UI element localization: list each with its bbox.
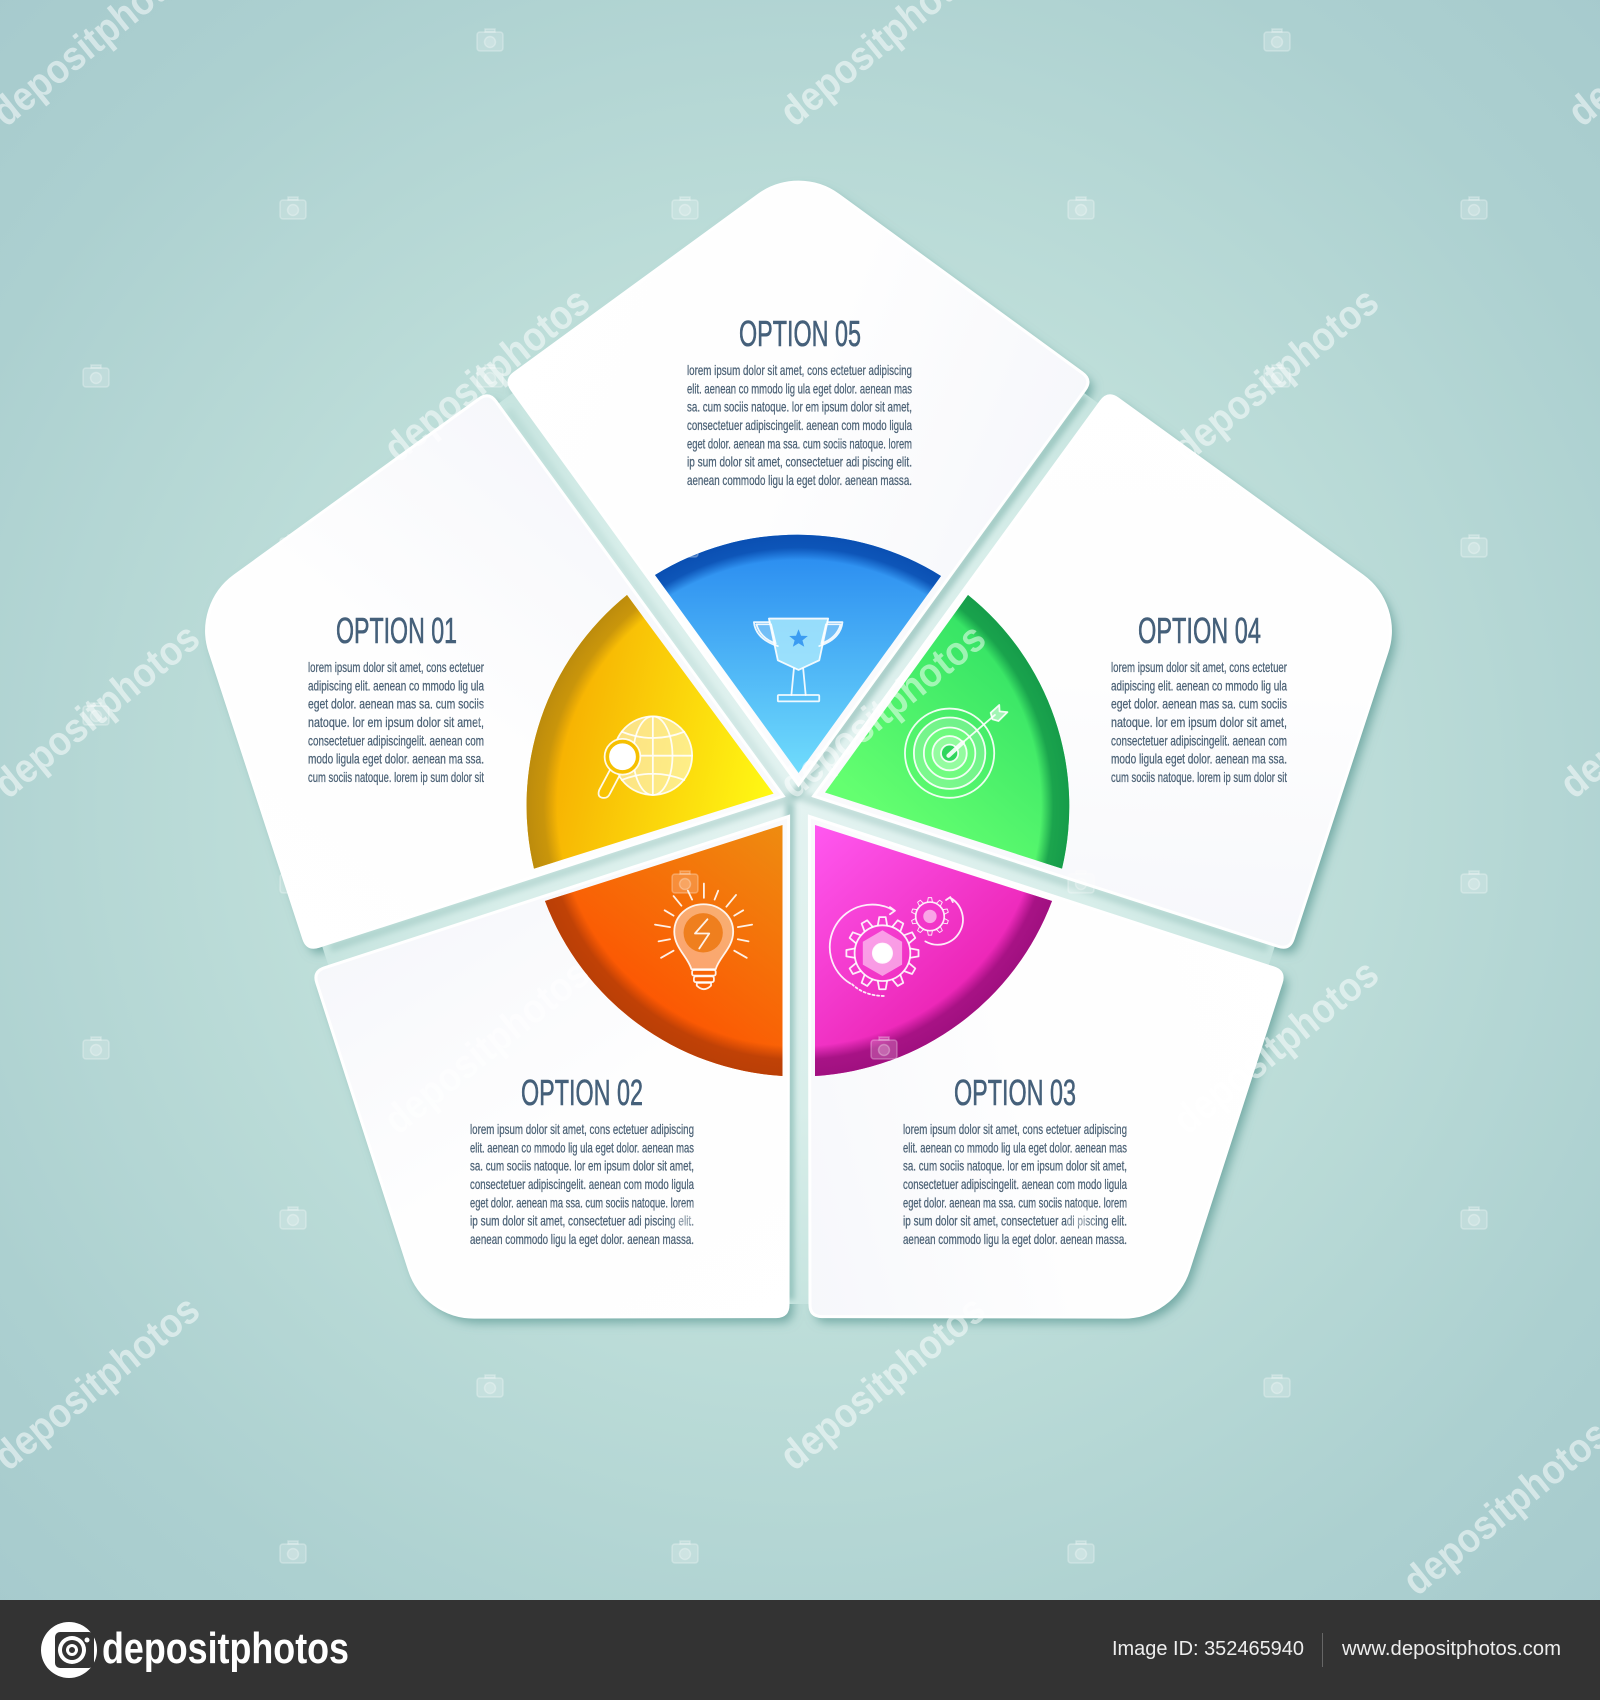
text block: option 01 [308, 659, 484, 785]
text block: option 02: lorem ipsum dolor sit amet, cons ectetuer adipiscing [470, 1121, 694, 1137]
text block: option 04: modo ligula eget dolor. aenean ma ssa. [1111, 751, 1287, 767]
watermark: depositphotos text: depositphotos [375, 950, 598, 1143]
icon: depositphotos logo [41, 1622, 97, 1678]
watermark: depositphotos text: depositphotos [1164, 278, 1387, 471]
panel: option 05 [509, 182, 1088, 785]
panel: option 02 [200, 646, 1023, 1474]
text block: option 04: consectetuer adipiscingelit. aenean com [1111, 732, 1287, 748]
text block: option 04: natoque. lor em ipsum dolor sit amet, [1111, 714, 1287, 730]
text block: option 03: ip sum dolor sit amet, consectetuer adi piscing elit. [903, 1213, 1127, 1229]
heading: option 03: OPTION 03 [954, 1072, 1076, 1113]
text block: option 05: lorem ipsum dolor sit amet, cons ectetuer adipiscing [687, 362, 912, 378]
text block: option 05: sa. cum sociis natoque. lor em ipsum dolor sit amet, [687, 399, 912, 415]
heading: option 02: OPTION 02 [521, 1072, 643, 1113]
text block: option 05: eget dolor. aenean ma ssa. cum sociis natoque. lorem [687, 435, 912, 451]
text block: option 02: ip sum dolor sit amet, consectetuer adi piscing elit. [470, 1213, 694, 1229]
watermark: depositphotos text: depositphotos [375, 278, 598, 471]
text block: option 02: elit. aenean co mmodo lig ula eget dolor. aenean mas [470, 1139, 694, 1155]
pie wedge: orange [545, 825, 782, 1076]
text block: option 02: consectetuer adipiscingelit. aenean com modo ligula [470, 1176, 694, 1192]
text block: option 01: natoque. lor em ipsum dolor sit amet, [308, 714, 484, 730]
text block: option 01: consectetuer adipiscingelit. aenean com [308, 732, 484, 748]
icon: trophy [754, 619, 842, 701]
pentagon panels [121, 182, 1476, 1474]
text block: option 03: lorem ipsum dolor sit amet, cons ectetuer adipiscing [903, 1121, 1127, 1137]
text block: option 02: sa. cum sociis natoque. lor em ipsum dolor sit amet, [470, 1158, 694, 1174]
text block: option 02 [470, 1121, 694, 1247]
text block: option 05: elit. aenean co mmodo lig ula eget dolor. aenean mas [687, 380, 912, 396]
text block: option 02: aenean commodo ligu la eget dolor. aenean massa. [470, 1231, 694, 1247]
watermark: depositphotos text: depositphotos [1164, 950, 1387, 1143]
text block: option 04: cum sociis natoque. lorem ip sum dolor sit [1111, 769, 1287, 785]
image id: Image ID: 352465940 [1112, 1638, 1304, 1660]
text block: option 05: consectetuer adipiscingelit. aenean com modo ligula [687, 417, 912, 433]
text block: option 01: lorem ipsum dolor sit amet, cons ectetuer [308, 659, 484, 675]
text block: option 04: lorem ipsum dolor sit amet, cons ectetuer [1111, 659, 1287, 675]
panel: option 04 [724, 335, 1476, 1071]
text block: option 03: aenean commodo ligu la eget dolor. aenean massa. [903, 1231, 1127, 1247]
heading: option 04: OPTION 04 [1138, 610, 1261, 651]
text block: option 01: eget dolor. aenean mas sa. cum sociis [308, 696, 484, 712]
pie wedge: magenta [815, 825, 1052, 1076]
text block: option 05: ip sum dolor sit amet, consectetuer adi piscing elit. [687, 454, 912, 470]
text block: option 04: adipiscing elit. aenean co mmodo lig ula [1111, 677, 1287, 693]
panel: option 03 [575, 646, 1398, 1474]
text block: option 01: adipiscing elit. aenean co mmodo lig ula [308, 677, 484, 693]
text block: option 03: sa. cum sociis natoque. lor em ipsum dolor sit amet, [903, 1158, 1127, 1174]
text block: option 01: cum sociis natoque. lorem ip sum dolor sit [308, 769, 484, 785]
pie wedge: blue [655, 535, 941, 773]
text block: option 03 [903, 1121, 1127, 1247]
watermark: depositphotos text: depositphotos [771, 1286, 994, 1479]
heading: option 01: OPTION 01 [336, 610, 457, 651]
pie wedge: yellow [527, 595, 774, 869]
icon: globe with magnifier [599, 716, 692, 798]
icon: target with arrow [905, 705, 1007, 798]
panel: option 01 [121, 335, 873, 1071]
text block: option 05: aenean commodo ligu la eget dolor. aenean massa. [687, 472, 912, 488]
text block: option 03: consectetuer adipiscingelit. aenean com modo ligula [903, 1176, 1127, 1192]
text block: option 03: elit. aenean co mmodo lig ula eget dolor. aenean mas [903, 1139, 1127, 1155]
icon: light bulb [655, 884, 752, 989]
watermark: camera icons [83, 29, 1487, 1563]
text block: option 04 [1111, 659, 1287, 785]
icon: gears [830, 897, 963, 996]
watermark: depositphotos text: depositphotos [771, 614, 994, 807]
text block: option 05 [687, 362, 912, 488]
logo wordmark: depositphotos [102, 1624, 349, 1673]
footer bar [0, 1600, 1600, 1700]
heading: option 05: OPTION 05 [739, 313, 861, 354]
text block: option 04: eget dolor. aenean mas sa. cum sociis [1111, 696, 1287, 712]
text block: option 03: eget dolor. aenean ma ssa. cum sociis natoque. lorem [903, 1194, 1127, 1210]
website url: www.depositphotos.com [1341, 1638, 1561, 1660]
text block: option 01: modo ligula eget dolor. aenean ma ssa. [308, 751, 484, 767]
pie wedge: green [825, 595, 1069, 869]
text block: option 02: eget dolor. aenean ma ssa. cum sociis natoque. lorem [470, 1194, 694, 1210]
